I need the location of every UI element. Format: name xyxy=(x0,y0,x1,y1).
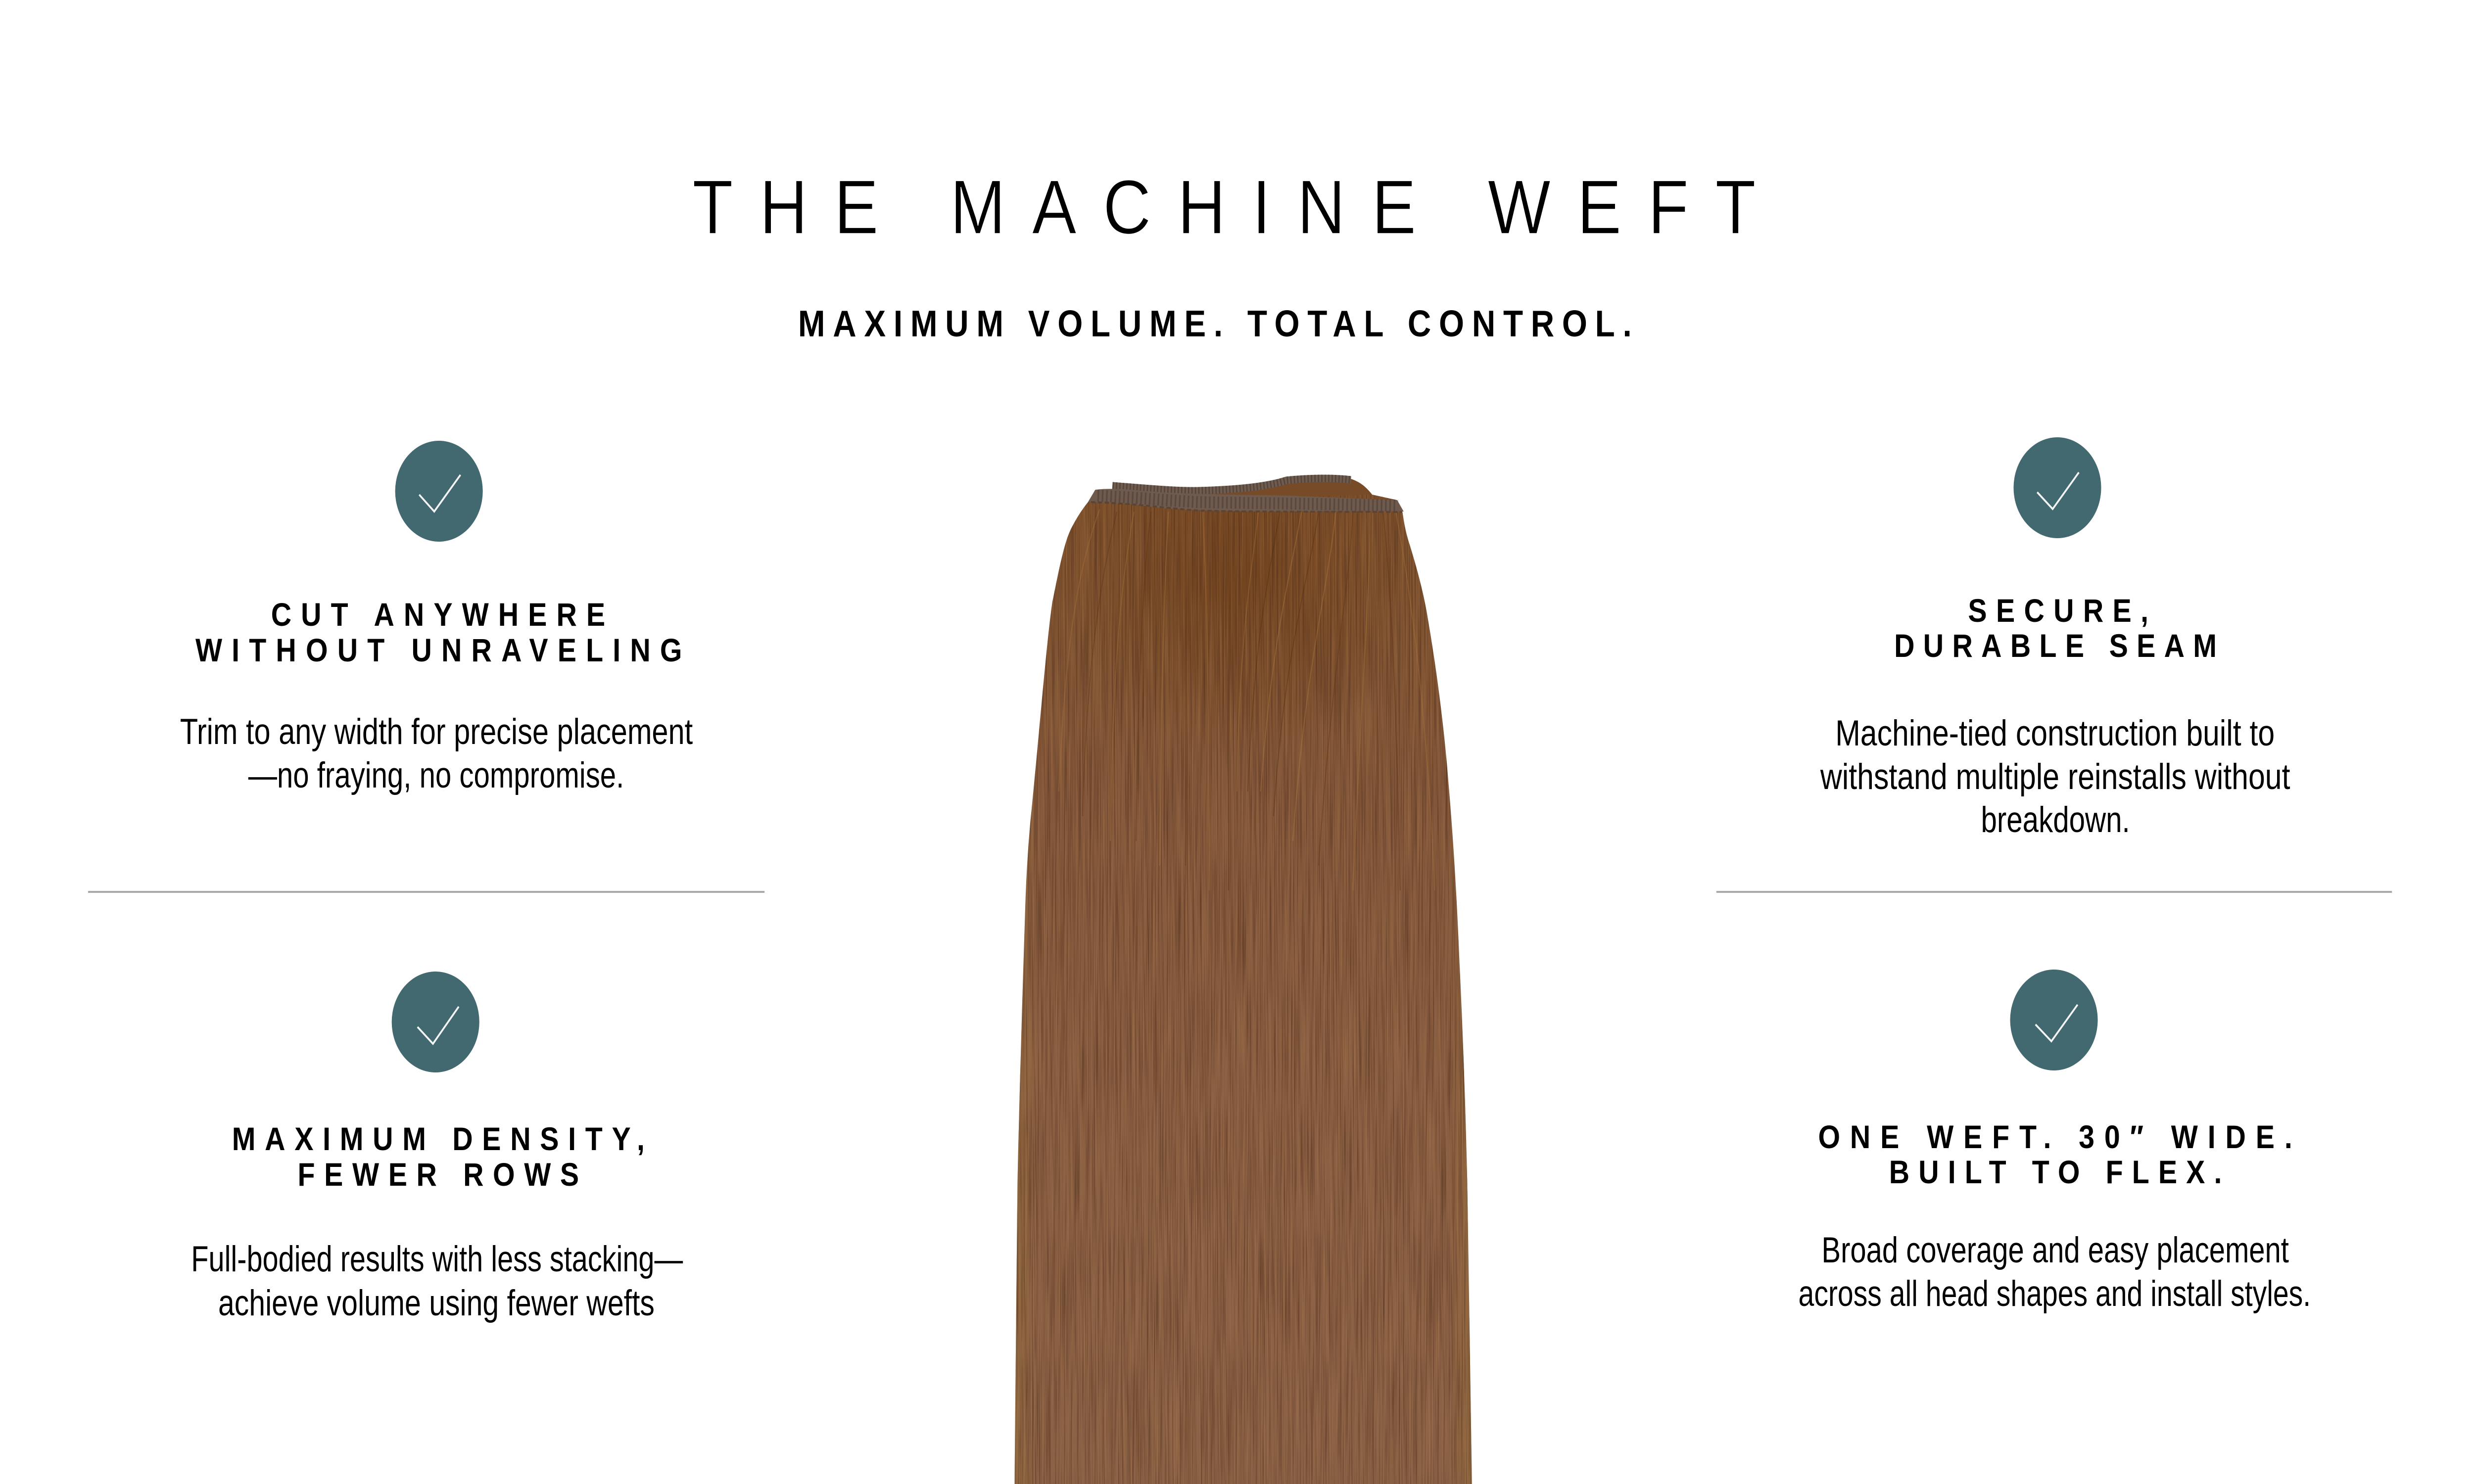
hair body xyxy=(1005,475,1482,1484)
body text: across all head shapes and install styles. xyxy=(1799,1274,2311,1314)
fanned strands near the seam xyxy=(1059,510,1434,890)
title: THE MACHINE WEFT xyxy=(692,164,1756,250)
hair weft photo xyxy=(1005,475,1482,1484)
icon: check circle xyxy=(2013,437,2101,538)
heading: BUILT TO FLEX. xyxy=(1889,1154,2222,1191)
body text: Trim to any width for precise placement xyxy=(180,712,693,752)
icon: check circle xyxy=(2010,970,2098,1070)
body text: Full-bodied results with less stacking— xyxy=(191,1239,683,1279)
panel: maximum density xyxy=(191,972,683,1323)
panel: secure durable seam xyxy=(1820,437,2290,840)
icon: check circle xyxy=(395,441,483,542)
heading: MAXIMUM DENSITY, xyxy=(232,1121,645,1158)
body text xyxy=(1799,1230,2311,1314)
heading: CUT ANYWHERE xyxy=(271,597,605,633)
heading xyxy=(1818,1119,2292,1191)
body text: Broad coverage and easy placement xyxy=(1821,1230,2289,1270)
back seam stitching xyxy=(1112,478,1351,491)
body text xyxy=(1820,713,2290,840)
panel: one weft 30 inch wide xyxy=(1799,970,2311,1314)
heading: SECURE, xyxy=(1968,593,2148,629)
heading: ONE WEFT. 30″ WIDE. xyxy=(1818,1119,2292,1156)
heading xyxy=(1894,593,2217,664)
back weft layer xyxy=(1112,478,1375,502)
heading xyxy=(232,1121,645,1193)
panel: cut anywhere xyxy=(180,441,693,795)
heading: WITHOUT UNRAVELING xyxy=(195,632,682,669)
body text: withstand multiple reinstalls without xyxy=(1820,757,2290,797)
body text xyxy=(180,712,693,795)
body text: achieve volume using fewer wefts xyxy=(218,1283,655,1323)
body text: —no fraying, no compromise. xyxy=(248,755,624,795)
subtitle: MAXIMUM VOLUME. TOTAL CONTROL. xyxy=(798,303,1632,344)
heading xyxy=(195,597,682,669)
heading: FEWER ROWS xyxy=(298,1157,579,1193)
heading: DURABLE SEAM xyxy=(1894,628,2217,664)
icon: check circle xyxy=(392,972,479,1072)
body text: breakdown. xyxy=(1981,800,2130,840)
front seam stitching xyxy=(1088,489,1404,512)
body text xyxy=(191,1239,683,1323)
body text: Machine-tied construction built to xyxy=(1835,713,2275,753)
